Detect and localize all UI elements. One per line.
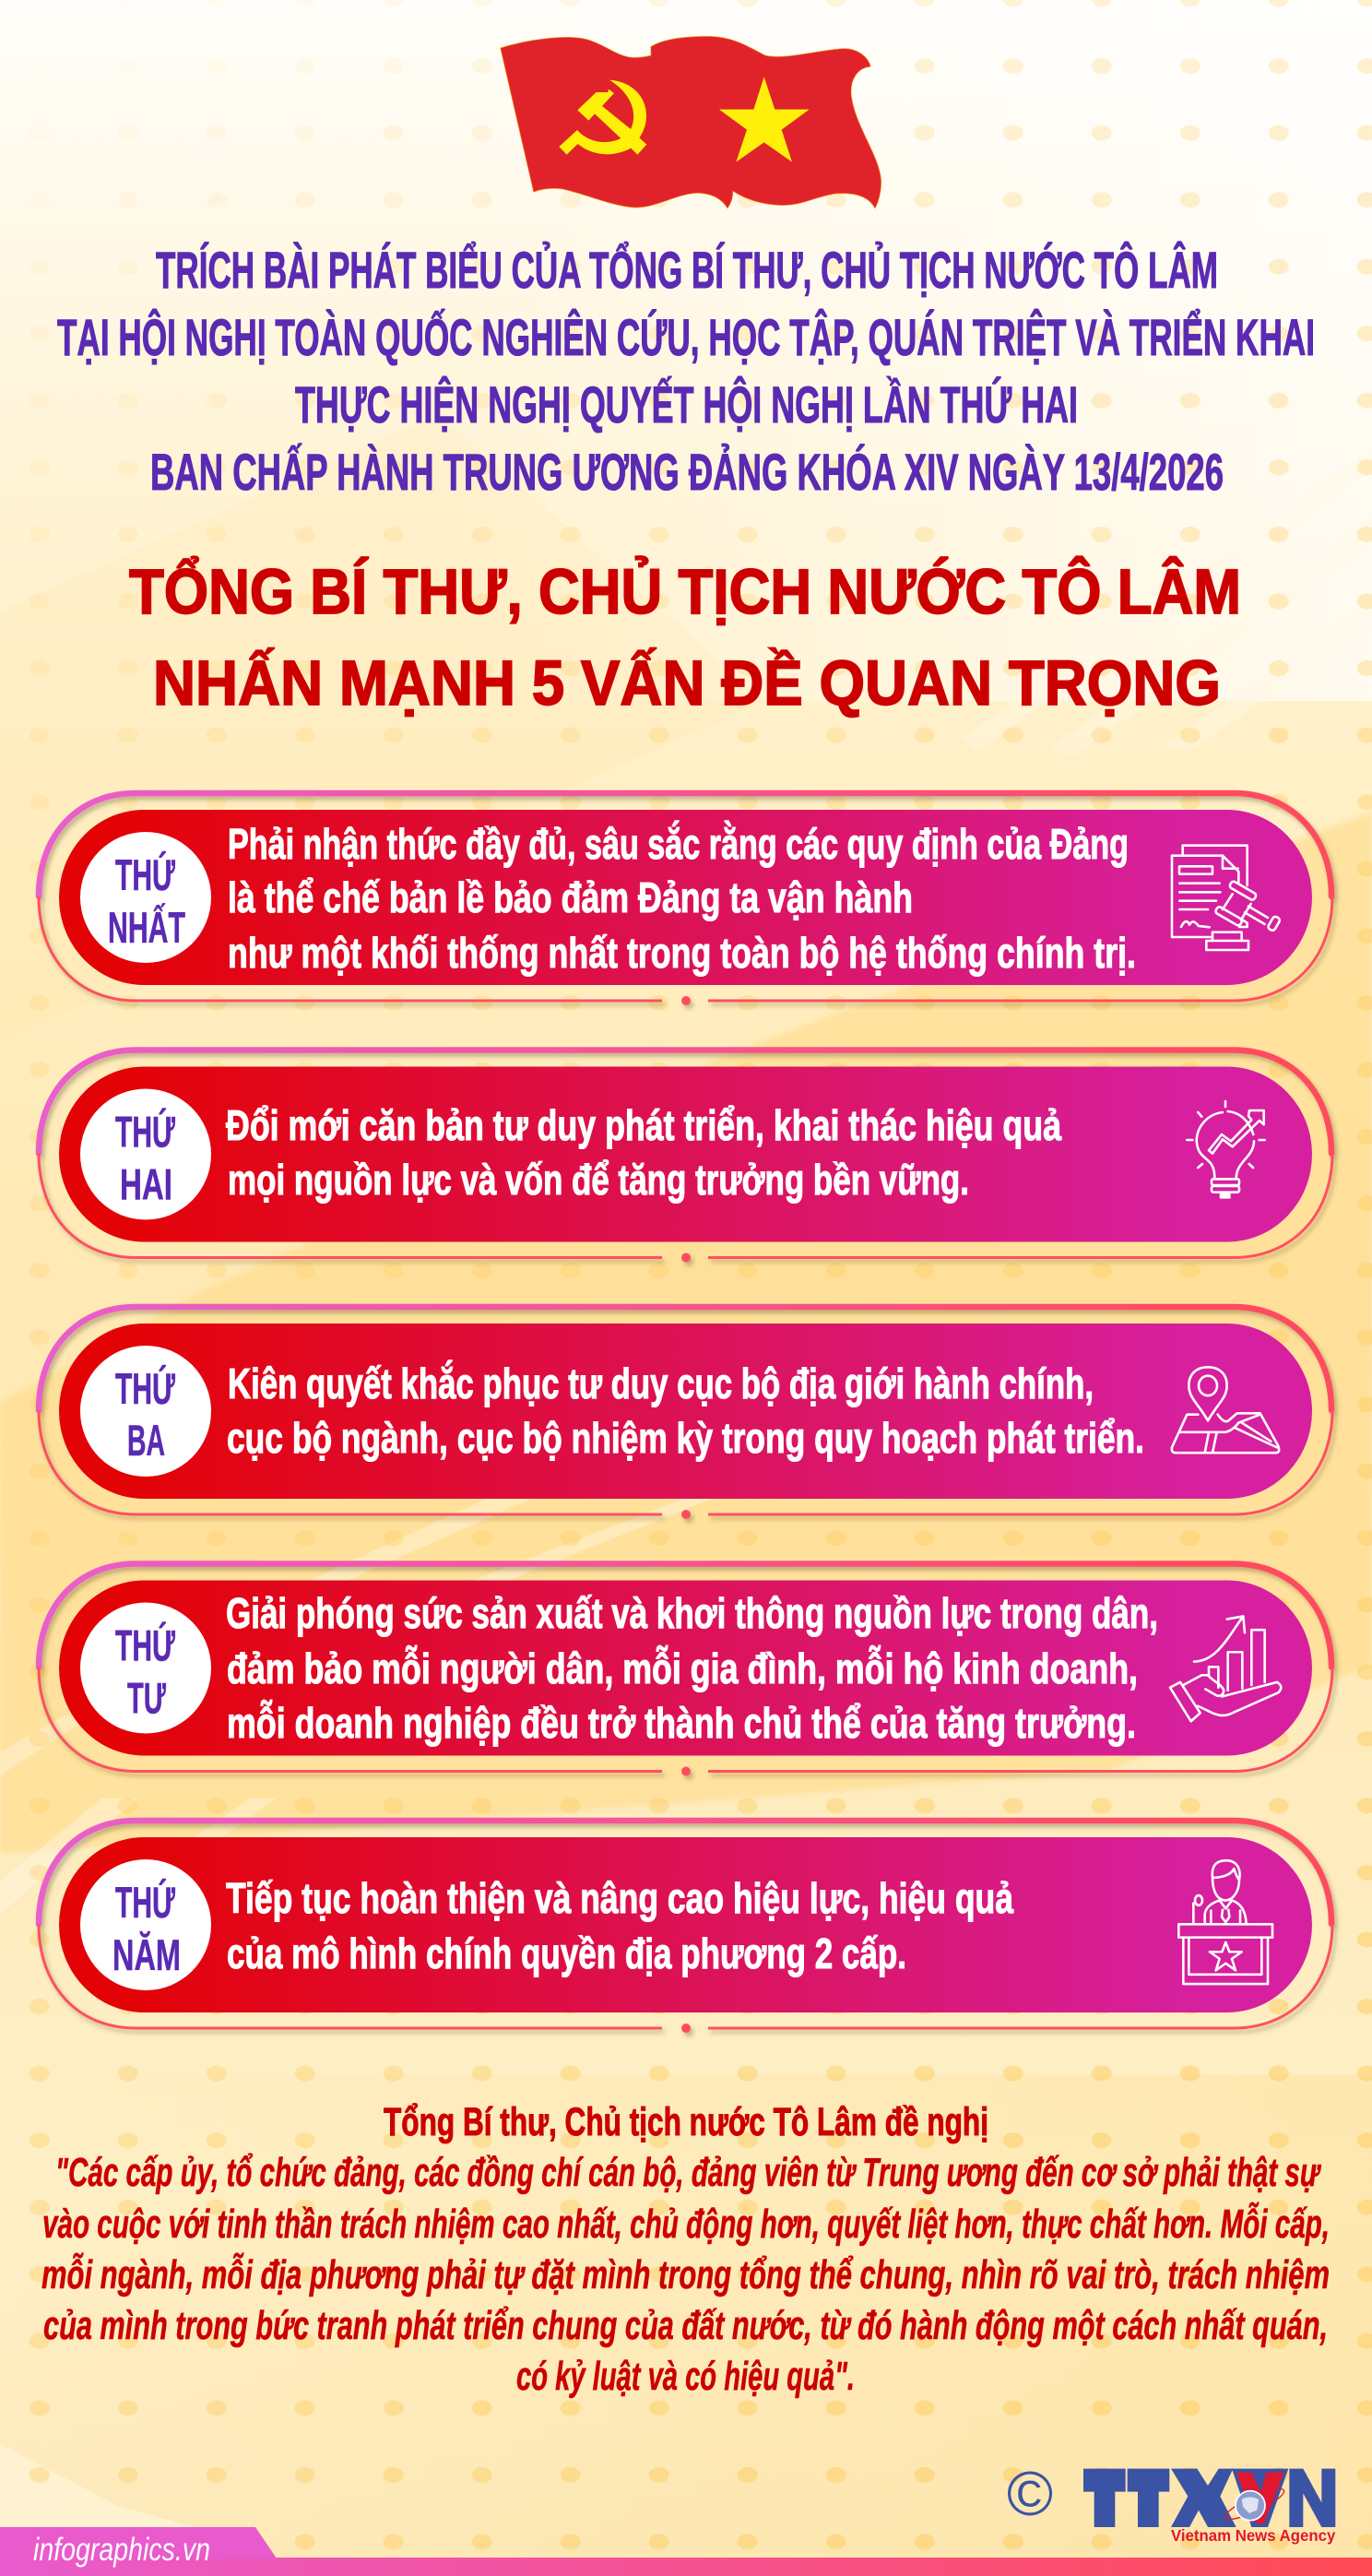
card pill (59, 1581, 1312, 1756)
quote text (41, 2150, 1330, 2399)
card frame (39, 1821, 1332, 2033)
website credit: infographics.vn (33, 2532, 210, 2568)
icon: document and gavel (1172, 846, 1281, 950)
logo letters (1083, 2469, 1335, 2527)
card text: đảm bảo mỗi người dân, mỗi gia đình, mỗi hộ kinh doanh, (227, 1644, 1138, 1692)
card frame (39, 1307, 1332, 1519)
ordinal badge: NĂM (112, 1930, 181, 1979)
card text (226, 1101, 1061, 1204)
card frame (39, 1564, 1332, 1776)
card text: là thể chế bản lề bảo đảm Đảng ta vận hành (228, 873, 913, 921)
logo: TTXVN (1083, 2469, 1336, 2545)
ordinal badge: THỨ (115, 1621, 175, 1669)
ordinal badge: NHẤT (108, 903, 185, 952)
card text (228, 820, 1136, 977)
heading: speech source (57, 241, 1315, 501)
card pill (59, 1324, 1312, 1499)
icon: star (719, 77, 810, 162)
card text: của mô hình chính quyền địa phương 2 cấp. (227, 1929, 906, 1977)
ordinal badge (80, 1603, 211, 1734)
quote text: có kỷ luật và có hiệu quả". (516, 2354, 855, 2399)
logo globe (1223, 2484, 1287, 2524)
ordinal badge (80, 1346, 211, 1477)
card text (227, 1359, 1144, 1462)
ordinal badge (80, 832, 211, 963)
card frame (39, 1050, 1332, 1262)
ordinal badge: THỨ (115, 850, 175, 899)
card pill (59, 810, 1312, 985)
ordinal badge: HAI (120, 1160, 172, 1208)
card text (226, 1589, 1158, 1747)
copyright symbol: © (1007, 2459, 1053, 2529)
logo V (1232, 2469, 1288, 2527)
card text (226, 1874, 1013, 1977)
icon: light bulb with arrow (1187, 1101, 1265, 1197)
card pill (59, 1837, 1312, 2012)
icon: map pin (1172, 1367, 1279, 1453)
icon: hammer and sickle (559, 80, 646, 155)
quote block (41, 2100, 1330, 2399)
title: TỔNG BÍ THƯ, CHỦ TỊCH NƯỚC TÔ LÂM (129, 556, 1241, 627)
card text: Đổi mới căn bản tư duy phát triển, khai thác hiệu quả (226, 1101, 1061, 1149)
panel: third point (39, 1307, 1332, 1519)
panel: fifth point (39, 1821, 1332, 2033)
icon: hand with growth chart (1170, 1616, 1281, 1721)
logo tagline: Vietnam News Agency (1171, 2526, 1336, 2545)
panel: second point (39, 1050, 1332, 1262)
icon: speaker at podium (1178, 1860, 1272, 1984)
card pill (59, 1066, 1312, 1241)
flag cloth (501, 36, 881, 208)
ordinal badge (80, 1088, 211, 1219)
title: NHẤN MẠNH 5 VẤN ĐỀ QUAN TRỌNG (153, 647, 1221, 718)
title (129, 556, 1241, 718)
ordinal badge: THỨ (115, 1878, 175, 1927)
card text: như một khối thống nhất trong toàn bộ hệ thống chính trị. (228, 929, 1136, 977)
ordinal badge (80, 1859, 211, 1990)
card text: mỗi doanh nghiệp đều trở thành chủ thể của tăng trưởng. (227, 1699, 1136, 1747)
ordinal badge: BA (127, 1416, 165, 1465)
ordinal badge: TƯ (127, 1673, 166, 1723)
card text: mọi nguồn lực và vốn để tăng trưởng bền vững. (228, 1156, 969, 1204)
footer bar (0, 2527, 1372, 2576)
footer tab (0, 2527, 277, 2558)
ordinal badge: THỨ (115, 1107, 175, 1157)
card text: Tiếp tục hoàn thiện và nâng cao hiệu lực, hiệu quả (226, 1874, 1013, 1922)
ordinal badge: THỨ (115, 1364, 175, 1413)
flag (501, 36, 881, 208)
card frame (39, 793, 1332, 1005)
card text: Kiên quyết khắc phục tư duy cục bộ địa giới hành chính, (228, 1359, 1094, 1407)
quote heading: Tổng Bí thư, Chủ tịch nước Tô Lâm đề nghị (384, 2100, 988, 2144)
panel: first point (39, 793, 1332, 1005)
panel: fourth point (39, 1564, 1332, 1776)
